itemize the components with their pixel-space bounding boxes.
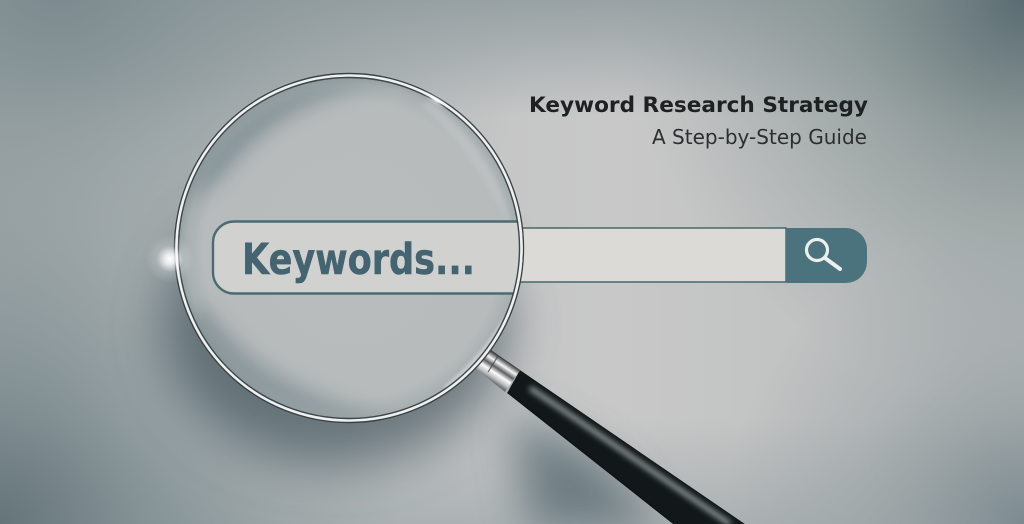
magnified search field <box>213 222 530 294</box>
search button <box>786 228 867 283</box>
handle grip <box>500 370 745 524</box>
chrome collar <box>475 348 520 392</box>
highlight: top rim glare <box>419 87 453 113</box>
lens drop shadow <box>163 185 507 465</box>
search bar <box>500 228 867 283</box>
search input field <box>500 228 786 282</box>
lens glass <box>176 75 522 421</box>
lens <box>174 74 530 422</box>
handle highlight <box>530 388 730 524</box>
handle cast shadow <box>510 410 665 524</box>
right edge light <box>424 102 507 218</box>
highlight: left rim glare <box>146 235 194 283</box>
subtitle: A Step-by-Step Guide <box>652 125 867 149</box>
lower right reflection <box>444 318 504 389</box>
magnifying glass handle <box>475 348 745 524</box>
icon: search magnifier <box>806 240 840 269</box>
top-left shading <box>189 78 366 202</box>
title: Keyword Research Strategy <box>529 93 868 117</box>
magnified keyword text: Keywords... <box>242 235 475 285</box>
bottom-left shading <box>192 304 371 418</box>
metal rim <box>174 74 524 422</box>
